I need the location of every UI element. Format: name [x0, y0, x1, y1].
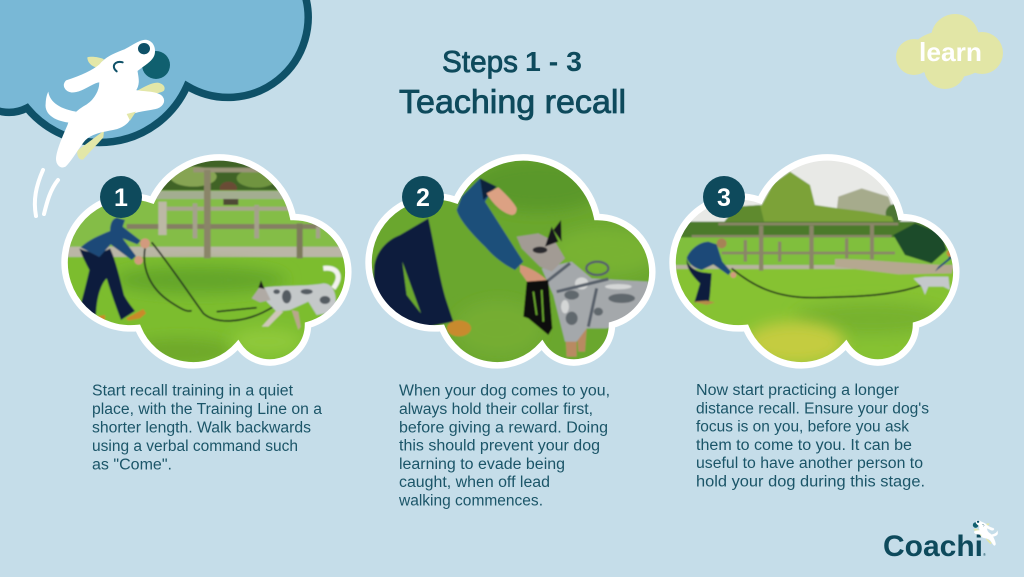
top-left blue cloud — [0, 0, 308, 142]
text block: step 2: caught, when off lead — [399, 474, 550, 491]
icon: leaping dog with ball — [46, 41, 170, 167]
text block: step 1: shorter length. Walk backwards — [92, 420, 311, 436]
panel: step 3 photo cloud — [662, 152, 968, 375]
text block: step 2: learning to evade being — [399, 456, 565, 473]
text block: step 3: useful to have another person to — [696, 455, 923, 472]
number badge 2: 2 — [416, 184, 430, 212]
white cloud outline — [65, 157, 348, 365]
number badge 3: 3 — [717, 184, 731, 212]
title: Teaching recall — [399, 83, 626, 120]
title — [399, 44, 626, 120]
number badge 1: 1 — [114, 184, 128, 212]
learn cloud badge — [896, 14, 1003, 89]
photo: trainer walking backwards with dog on line — [68, 160, 346, 362]
text block: step 2: walking commences. — [398, 492, 543, 510]
text block: step 2: this should prevent your dog — [399, 438, 600, 455]
text block: step 1: place, with the Training Line on a — [92, 401, 322, 418]
number badge 1 — [100, 176, 142, 218]
text block: step 3: hold your dog during this stage. — [696, 474, 925, 490]
number badge 3 — [703, 176, 745, 218]
white cloud outline — [673, 157, 956, 365]
Coachi logo — [883, 520, 998, 563]
text block: step 3: them to come to you. It can be — [696, 437, 912, 454]
text block: step 1: Start recall training in a quiet — [92, 383, 294, 400]
title: Steps — [442, 44, 518, 79]
Coachi logo: ® — [983, 552, 986, 557]
icon: small logo dog — [973, 520, 998, 545]
text block: step 3 — [696, 382, 929, 490]
text block: step 1 — [92, 383, 322, 473]
panel: step 2 photo cloud — [362, 152, 668, 375]
learn cloud badge: learn — [919, 37, 982, 67]
text block: step 1: as "Come". — [92, 456, 172, 473]
text block: step 2: always hold their collar first, — [399, 401, 593, 418]
white cloud outline — [369, 157, 652, 365]
panel: step 1 photo cloud — [57, 152, 363, 375]
text block: step 3: focus is on you, before you ask — [696, 419, 909, 436]
text block: step 3: Now start practicing a longer — [696, 382, 899, 399]
text block: step 3: distance recall. Ensure your dog's — [696, 400, 929, 417]
text block: step 1: using a verbal command such — [92, 438, 298, 455]
text block: step 2 — [398, 383, 610, 510]
Coachi logo: Coachi — [883, 530, 983, 563]
title: 1 - 3 — [525, 46, 582, 77]
photo: longer distance recall — [676, 160, 954, 362]
number badge 2 — [402, 176, 444, 218]
text block: step 2: When your dog comes to you, — [399, 383, 610, 400]
photo: holding dog's collar before reward — [372, 160, 650, 362]
motion lines — [35, 170, 58, 216]
text block: step 2: before giving a reward. Doing — [399, 419, 608, 436]
